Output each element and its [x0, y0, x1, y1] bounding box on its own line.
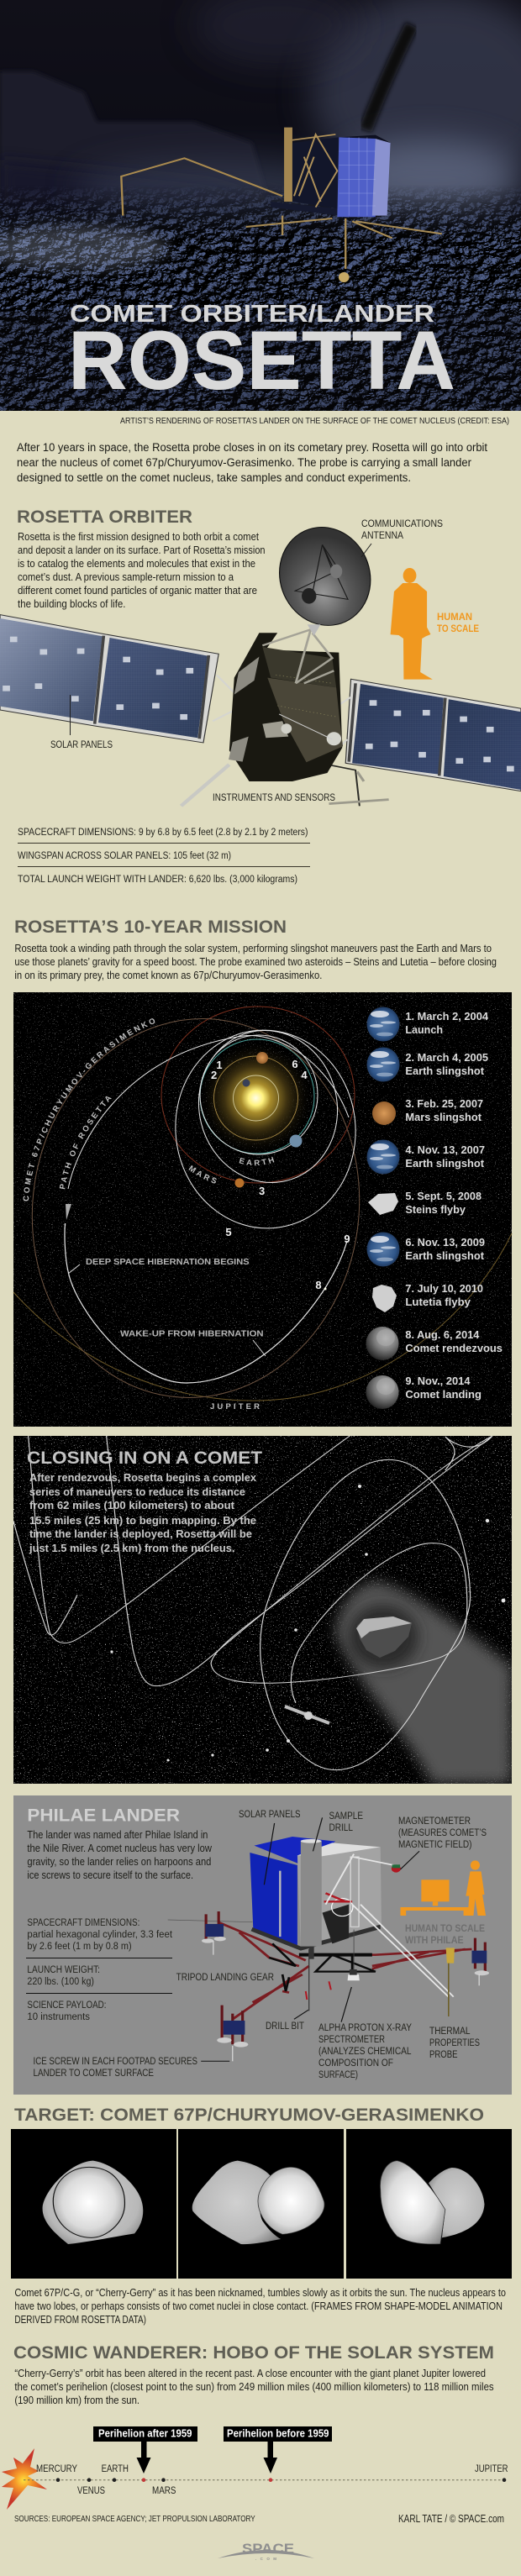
Philae part labels: COMPOSITION OF: [318, 2058, 393, 2069]
SPACE.com logo: SPACE: [242, 2541, 294, 2557]
event 9: [366, 1375, 482, 1409]
orbiter specifications: WINGSPAN ACROSS SOLAR PANELS: 105 feet (32 m): [18, 851, 231, 861]
event 2: Earth slingshot: [405, 1065, 485, 1077]
planet labels: MARS: [152, 2486, 176, 2496]
mission description: [14, 943, 497, 981]
wanderer description: [14, 2368, 494, 2406]
label: communications antenna: [361, 519, 443, 557]
human-to-scale icon: [400, 1860, 486, 1916]
Philae specifications: LAUNCH WEIGHT:: [27, 1965, 100, 1975]
orbit labels: [24, 1018, 274, 1412]
label: human to scale: HUMAN: [437, 612, 472, 623]
Philae heading: PHILAE LANDER: [27, 1806, 180, 1826]
footpads: [202, 1911, 489, 2061]
label: solar panels: SOLAR PANELS: [50, 740, 113, 750]
callout: perihelion after 1959: [93, 2426, 197, 2473]
Philae specifications: 10 instruments: [27, 2012, 90, 2022]
closing text: from 62 miles (100 kilometers) to about: [29, 1499, 235, 1511]
Philae specifications: [26, 1918, 173, 2022]
callout: perihelion before 1959: [224, 2426, 332, 2473]
planet labels: [36, 2464, 508, 2496]
event 5: 5. Sept. 5, 2008: [405, 1190, 482, 1202]
human to scale silhouette: [391, 568, 433, 680]
drill bit pieces: [306, 1981, 331, 2000]
spacecraft body: [229, 633, 343, 781]
hero title: [68, 301, 455, 407]
path of Rosetta: [65, 1016, 366, 1383]
closing text: time the lander is deployed, Rosetta will be: [29, 1527, 252, 1540]
numbered encounter markers: 6: [292, 1058, 298, 1070]
orbit annotations: DEEP SPACE HIBERNATION BEGINS: [86, 1257, 250, 1267]
Philae part labels: ICE SCREW IN EACH FOOTPAD SECURES: [34, 2057, 197, 2067]
orbit labels: MARS: [188, 1164, 217, 1183]
callout: perihelion after 1959: Perihelion after 1959: [98, 2428, 192, 2440]
closing text: After rendezvous, Rosetta begins a complex: [29, 1471, 257, 1484]
direction arrow: [66, 1204, 71, 1220]
panel: solar system mission map: [13, 992, 513, 1427]
event 3: [372, 1097, 483, 1125]
hero subtitle: COMET ORBITER/LANDER: [70, 301, 434, 328]
comet frame 1: [43, 2161, 143, 2244]
comet description: DERIVED FROM ROSETTA DATA): [14, 2314, 146, 2326]
Philae part labels: (ANALYZES CHEMICAL: [318, 2047, 412, 2057]
Philae description: The lander was named after Philae Island in: [27, 1829, 208, 1841]
orbiter description: different comet found particles of organic matter that are: [18, 585, 257, 597]
heading: 10-year mission: ROSETTA’S 10-YEAR MISSION: [14, 917, 287, 937]
comet nucleus: [356, 1617, 412, 1658]
event 6: [366, 1232, 485, 1267]
Philae specifications: by 2.6 feet (1 m by 0.8 m): [27, 1942, 132, 1952]
Philae part labels: TRIPOD LANDING GEAR: [176, 1973, 274, 1983]
wanderer description: (190 million km) from the sun.: [14, 2395, 139, 2406]
antenna mast: [262, 629, 334, 683]
event 8: [366, 1327, 503, 1360]
event 5: Steins flyby: [405, 1203, 466, 1216]
Philae part labels: MAGNETIC FIELD): [398, 1840, 472, 1850]
heading: cosmic wanderer: COSMIC WANDERER: HOBO OF THE SOLAR SYSTEM: [13, 2343, 494, 2363]
numbered encounter markers: 1: [216, 1059, 223, 1071]
orbiter specifications: [18, 828, 310, 885]
event 1: 1. March 2, 2004: [405, 1010, 489, 1023]
instruments and arms: [325, 1854, 454, 2016]
spacecraft legs and booms: [181, 675, 389, 806]
right solar wing: [345, 679, 521, 791]
event 1: [366, 1007, 489, 1042]
numbered encounter markers: 8: [315, 1279, 322, 1291]
panel: closing in on a comet: [13, 1435, 512, 1784]
dark halo around nucleus: [348, 1605, 418, 1669]
panel: Philae lander: [13, 1795, 512, 2095]
planet labels: EARTH: [102, 2464, 129, 2474]
orbiter spacecraft illustration: [0, 523, 521, 806]
leader lines: [201, 1817, 419, 2061]
Philae part labels: PROPERTIES: [429, 2038, 480, 2048]
event 9: Comet landing: [405, 1388, 482, 1401]
closing heading: CLOSING IN ON A COMET: [27, 1448, 262, 1468]
numbered encounter markers: 2: [211, 1069, 217, 1081]
Philae specifications: 220 lbs. (100 kg): [27, 1977, 94, 1987]
orbit labels: PATH OF ROSETTA: [59, 1096, 112, 1190]
Philae part labels: PROBE: [429, 2050, 458, 2060]
Philae part labels: [34, 1810, 487, 2080]
planet labels: VENUS: [77, 2486, 105, 2496]
event 6: Earth slingshot: [405, 1249, 485, 1262]
event 7: Lutetia flyby: [405, 1296, 471, 1308]
comet shape model frames: [11, 2129, 512, 2279]
antenna dish: [272, 523, 378, 636]
lander body: [250, 1837, 382, 1959]
comet frame 3: [380, 2161, 484, 2244]
orbit labels: JUPITER: [210, 1402, 260, 1412]
sun-orbit planets: [235, 1052, 326, 1291]
label: instruments and sensors: INSTRUMENTS AND SENSORS: [213, 793, 335, 803]
distance axis: [24, 2479, 504, 2481]
Philae part labels: SURFACE): [318, 2070, 358, 2080]
Philae specifications: partial hexagonal cylinder, 3.3 feet: [27, 1930, 173, 1940]
probe: [285, 1706, 329, 1723]
event 8: Comet rendezvous: [405, 1342, 503, 1354]
sun starburst: [2, 2448, 47, 2510]
orbiter description: the building blocks of life.: [18, 598, 126, 610]
comet frame 2: [192, 2161, 324, 2244]
sources: SOURCES: EUROPEAN SPACE AGENCY; JET PROPULSION LABORATORY: [14, 2514, 255, 2524]
numbered encounter markers: 4: [301, 1069, 308, 1081]
event 7: [372, 1282, 483, 1312]
orbit labels: EARTH: [239, 1157, 274, 1166]
hero image: lander on comet surface: [0, 0, 521, 411]
planet dots: [56, 2478, 506, 2482]
Philae description: gravity, so the lander relies on harpoons and: [27, 1856, 211, 1868]
Philae part labels: THERMAL: [429, 2027, 471, 2037]
orbiter description: comet’s dust. A previous sample-return mission to a: [18, 571, 234, 583]
magnetometer sensor: [392, 1864, 401, 1873]
SPACE.com logo: [218, 2541, 314, 2561]
Philae specifications: SPACECRAFT DIMENSIONS:: [27, 1918, 139, 1928]
event 4: Earth slingshot: [405, 1157, 485, 1170]
event 8: 8. Aug. 6, 2014: [405, 1328, 480, 1341]
Philae part labels: MAGNETOMETER: [398, 1816, 471, 1827]
callout: perihelion before 1959: Perihelion before 1959: [227, 2428, 329, 2440]
event 7: 7. July 10, 2010: [405, 1282, 483, 1295]
orbiter specifications: SPACECRAFT DIMENSIONS: 9 by 6.8 by 6.5 feet (2.8 by 2.1 by 2 meters): [18, 828, 308, 838]
planet labels: MERCURY: [36, 2464, 77, 2474]
Philae description: [27, 1829, 213, 1881]
event 2: [366, 1047, 488, 1082]
event 1: Launch: [405, 1023, 443, 1036]
numbered encounter markers: [211, 1058, 350, 1291]
lander illustration: [168, 1817, 489, 2061]
Philae description: ice screws to secure itself to the surface.: [27, 1869, 193, 1881]
event 3: 3. Feb. 25, 2007: [405, 1097, 483, 1110]
closing text: 15.5 miles (25 km) to begin mapping. By the: [29, 1514, 256, 1527]
lander in hero: [121, 128, 442, 282]
Philae part labels: SPECTROMETER: [318, 2035, 385, 2045]
timeline legend: [366, 1007, 503, 1409]
orbiter description: and deposit a lander on its surface. Part of Rosetta’s mission: [18, 544, 266, 556]
Philae part labels: DRILL BIT: [266, 2021, 304, 2032]
label: communications antenna: ANTENNA: [361, 531, 403, 541]
sun glow: [198, 1041, 313, 1155]
label: human to scale: TO SCALE: [437, 624, 479, 634]
closing text: series of maneuvers to reduce its distance: [29, 1485, 245, 1498]
approach trajectory: [13, 1435, 493, 1770]
intro paragraph: After 10 years in space, the Rosetta probe closes in on its cometary prey. Rosetta will go into orbit: [17, 441, 487, 454]
orbiter description: [18, 531, 266, 610]
Philae description: the Nile River. A comet nucleus has very low: [27, 1843, 213, 1854]
orbit annotations: WAKE-UP FROM HIBERNATION: [120, 1329, 264, 1339]
heading: target comet: TARGET: COMET 67P/CHURYUMOV-GERASIMENKO: [14, 2105, 484, 2125]
Philae part labels: WITH PHILAE: [405, 1936, 464, 1946]
Philae part labels: (MEASURES COMET’S: [398, 1828, 487, 1838]
left solar wing: [0, 615, 218, 743]
SPACE.com logo: .COM: [255, 2557, 276, 2561]
event 4: [366, 1139, 485, 1175]
heading: Rosetta Orbiter: ROSETTA ORBITER: [17, 507, 192, 527]
planetary orbits: [8, 997, 512, 1419]
mission description: in on its primary prey, the comet known as 67p/Churyumov-Gerasimenko.: [14, 970, 322, 981]
orbiter description: Rosetta is the first mission designed to both orbit a comet: [18, 531, 259, 543]
comet coma: [335, 1582, 512, 1784]
Philae part labels: ALPHA PROTON X-RAY: [318, 2023, 412, 2033]
orbit annotations: [68, 1257, 266, 1356]
label: communications antenna: COMMUNICATIONS: [361, 519, 443, 529]
planet labels: JUPITER: [475, 2464, 508, 2474]
Philae part labels: HUMAN TO SCALE: [405, 1924, 485, 1934]
event 6: 6. Nov. 13, 2009: [405, 1236, 485, 1249]
Philae specifications: SCIENCE PAYLOAD:: [27, 2000, 106, 2011]
intro paragraph: near the nucleus of comet 67p/Churyumov-Gerasimenko. The probe is carrying a small lander: [17, 456, 471, 469]
hero main title: ROSETTA: [68, 313, 455, 407]
Philae part labels: SAMPLE: [329, 1811, 363, 1822]
label: solar panels: [50, 695, 113, 750]
closing text: just 1.5 miles (2.5 km) from the nucleus.: [29, 1542, 234, 1554]
closing text: [29, 1471, 257, 1554]
APXS sensor: [348, 1969, 360, 1980]
event 5: [368, 1190, 482, 1216]
landing gear: [168, 1920, 471, 2019]
Philae part labels: SOLAR PANELS: [239, 1810, 301, 1820]
orbiter specifications: TOTAL LAUNCH WEIGHT WITH LANDER: 6,620 lbs. (3,000 kilograms): [18, 875, 297, 885]
numbered encounter markers: 3: [259, 1185, 265, 1197]
numbered encounter markers: 9: [344, 1233, 350, 1245]
orbiter description: is to catalog the elements and molecules that exist in the: [18, 558, 255, 570]
intro paragraph: [17, 441, 487, 484]
numbered encounter markers: 5: [225, 1226, 232, 1238]
event 3: Mars slingshot: [405, 1111, 482, 1123]
intro paragraph: designed to settle on the comet nucleus, take samples and conduct experiments.: [17, 471, 411, 484]
thermal probe: [446, 1948, 455, 1964]
event 2: 2. March 4, 2005: [405, 1051, 488, 1064]
comet description: [14, 2287, 506, 2326]
event 9: 9. Nov., 2014: [405, 1375, 471, 1387]
label: human to scale: [437, 612, 479, 634]
bright stars: [110, 1485, 505, 1761]
event 4: 4. Nov. 13, 2007: [405, 1143, 485, 1156]
Philae part labels: LANDER TO COMET SURFACE: [34, 2069, 154, 2079]
perihelion scale chart: [2, 2426, 508, 2510]
orbit labels: COMET 67P/CHURYUMOV-GERASIMENKO: [24, 1018, 155, 1201]
Philae part labels: DRILL: [329, 1823, 354, 1833]
